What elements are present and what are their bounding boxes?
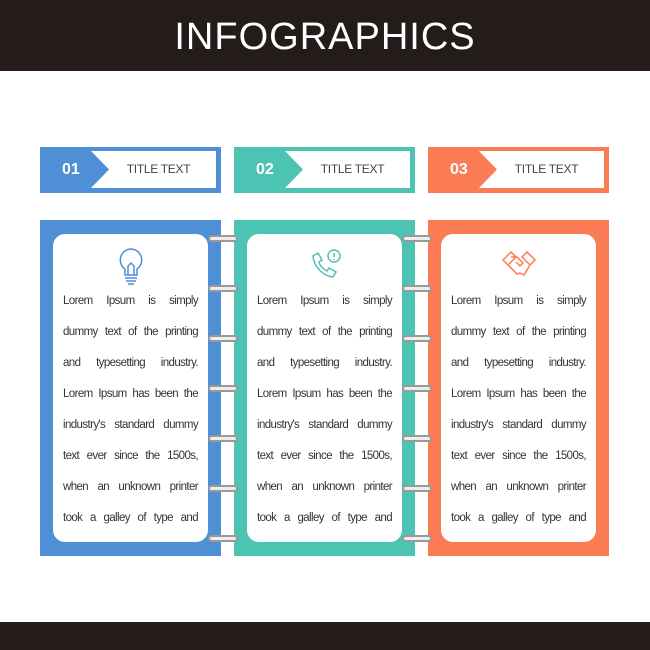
title bar 02: 02 — [256, 161, 274, 178]
panel 3 — [428, 220, 609, 556]
panel 3: and typesetting industry. — [451, 357, 586, 369]
title bar 02 — [234, 147, 415, 193]
panel 1: dummy text of the printing — [63, 326, 198, 338]
panel 1: and typesetting industry. — [63, 357, 198, 369]
panel 3: industry's standard dummy — [451, 419, 586, 431]
header — [0, 0, 650, 71]
icon: phone — [312, 249, 341, 278]
icon: handshake — [502, 251, 536, 276]
panel 2: Lorem Ipsum is simply — [257, 295, 392, 307]
icon: bulb — [120, 248, 142, 285]
panel 2: industry's standard dummy — [257, 419, 392, 431]
header: INFOGRAPHICS — [174, 16, 476, 58]
panel 1: Lorem Ipsum is simply — [63, 295, 198, 307]
panel 1: text ever since the 1500s, — [63, 450, 198, 462]
title bar 01: 01 — [62, 161, 80, 178]
panel 2: Lorem Ipsum has been the — [257, 388, 392, 400]
panel 2: when an unknown printer — [257, 481, 392, 493]
panel 3: took a galley of type and — [451, 512, 586, 524]
title bar 03: 03 — [450, 161, 468, 178]
panel 2: text ever since the 1500s, — [257, 450, 392, 462]
footer — [0, 622, 650, 650]
panel 1 — [40, 220, 221, 556]
title bar 03 — [428, 147, 609, 193]
binder rings — [208, 235, 432, 542]
panel 1: took a galley of type and — [63, 512, 198, 524]
panel 2: and typesetting industry. — [257, 357, 392, 369]
panel 3: when an unknown printer — [451, 481, 586, 493]
title bar 01 — [40, 147, 221, 193]
panel 3: text ever since the 1500s, — [451, 450, 586, 462]
panel 1: industry's standard dummy — [63, 419, 198, 431]
panel 2: dummy text of the printing — [257, 326, 392, 338]
title bar 01: TITLE TEXT — [127, 162, 190, 176]
panel 3: Lorem Ipsum has been the — [451, 388, 586, 400]
title bar 03: TITLE TEXT — [515, 162, 578, 176]
panel 2: took a galley of type and — [257, 512, 392, 524]
panel 3: dummy text of the printing — [451, 326, 586, 338]
panel 1: when an unknown printer — [63, 481, 198, 493]
panel 3: Lorem Ipsum is simply — [451, 295, 586, 307]
panel 1: Lorem Ipsum has been the — [63, 388, 198, 400]
panel 2 — [234, 220, 415, 556]
title bar 02: TITLE TEXT — [321, 162, 384, 176]
